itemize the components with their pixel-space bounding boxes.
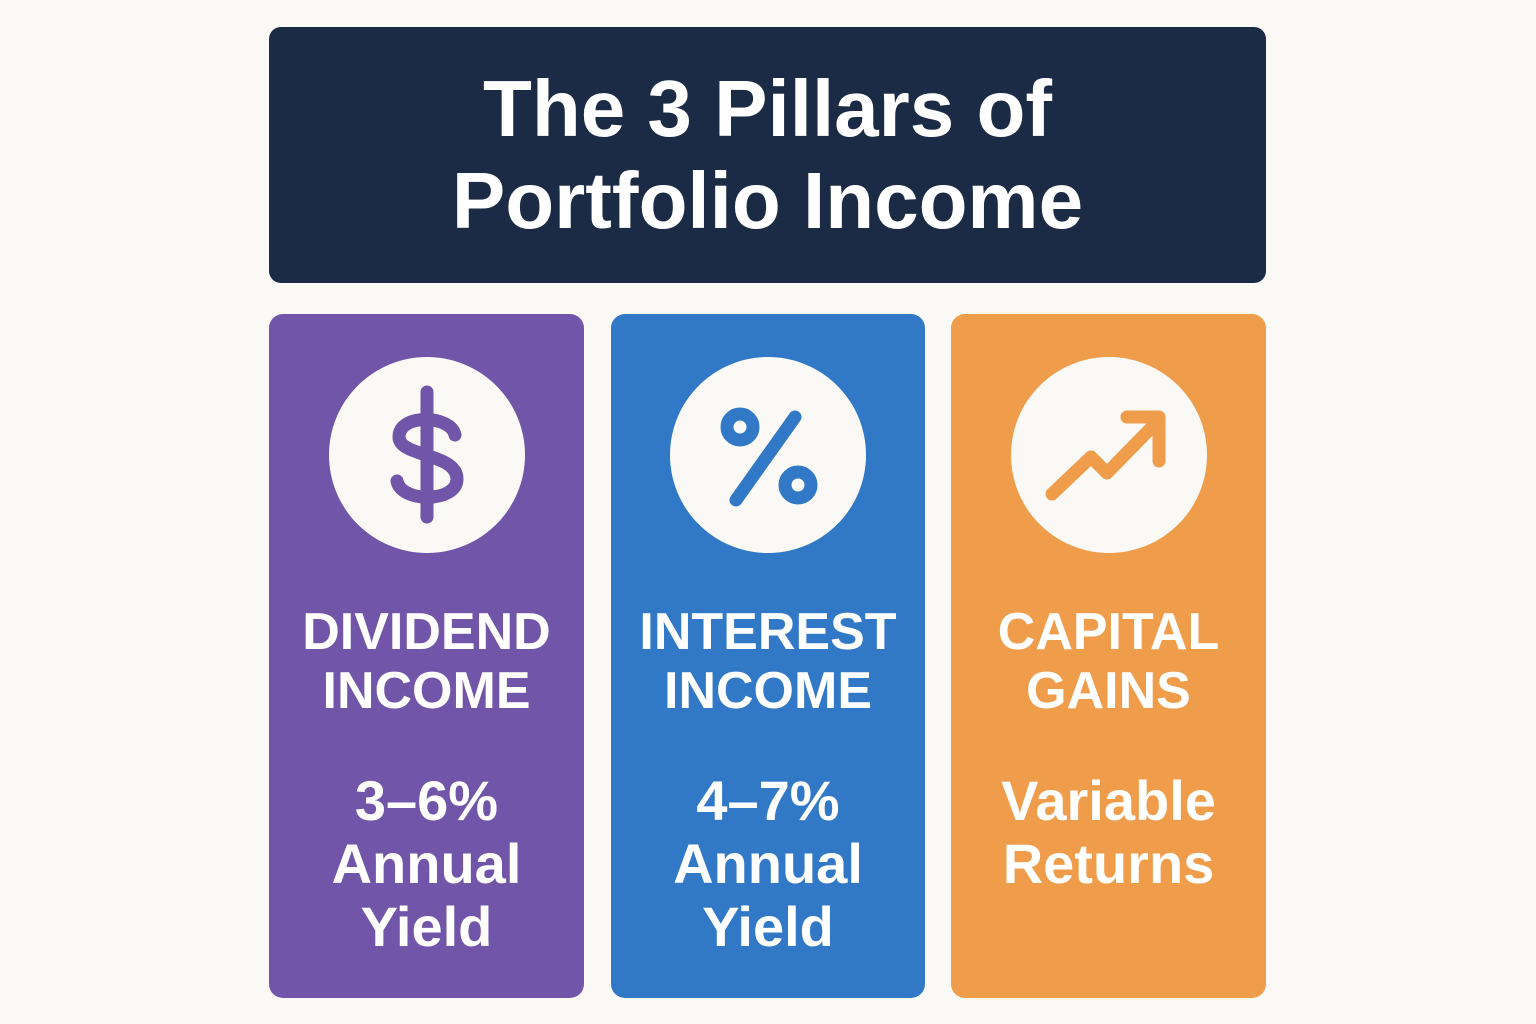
text: yield — [332, 769, 521, 958]
heading: interest income: INTEREST — [639, 603, 897, 661]
text: yield: Yield — [702, 895, 834, 958]
text: returns: Variable — [1001, 769, 1216, 832]
icon: dollar sign — [328, 357, 524, 553]
heading: interest income: INCOME — [664, 662, 872, 720]
heading: capital gains: GAINS — [1026, 662, 1191, 720]
text: yield: Yield — [361, 895, 492, 958]
heading: capital gains — [998, 603, 1219, 720]
text: yield — [673, 769, 863, 958]
title — [269, 27, 1266, 283]
panel: interest income — [611, 314, 925, 998]
text: yield: Annual — [673, 832, 863, 895]
heading: interest income — [639, 603, 897, 720]
icon: trend arrow — [1010, 357, 1206, 553]
panel: dividend income — [269, 314, 584, 998]
panel: capital gains — [951, 314, 1266, 998]
heading: dividend income — [302, 603, 551, 720]
text: yield: 3–6% — [355, 769, 498, 832]
heading: dividend income: INCOME — [322, 662, 530, 720]
text: returns: Returns — [1003, 832, 1214, 895]
heading: capital gains: CAPITAL — [998, 603, 1219, 661]
heading: dividend income: DIVIDEND — [302, 603, 551, 661]
text: yield: 4–7% — [696, 769, 840, 832]
title: The 3 Pillars of — [483, 64, 1052, 153]
text: returns — [1001, 769, 1216, 895]
title: Portfolio Income — [452, 156, 1083, 245]
text: yield: Annual — [332, 832, 521, 895]
icon: percent — [670, 357, 866, 553]
